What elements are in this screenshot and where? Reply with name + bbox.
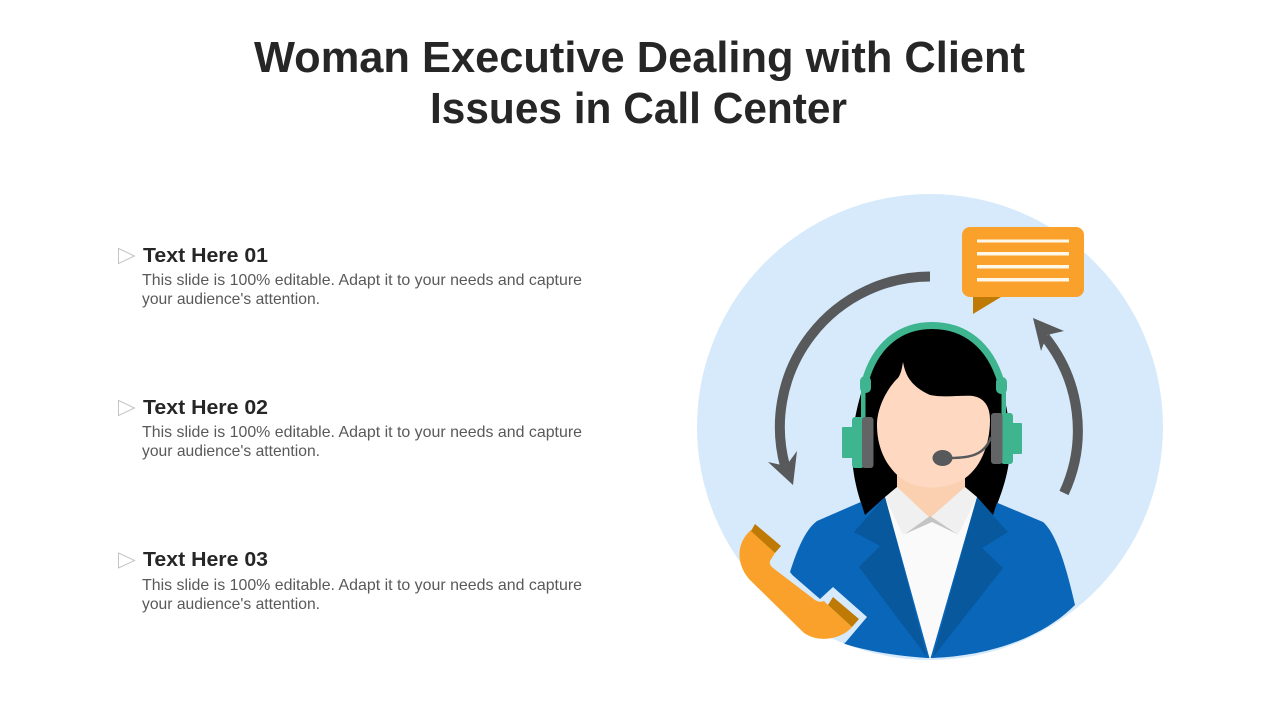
right lapel (933, 498, 1008, 657)
heading 3: Text Here 03 (143, 549, 268, 571)
illustration: call center executive (697, 194, 1163, 660)
body text 2: your audience's attention. (142, 443, 320, 460)
icon: triangle bullet 1 (118, 248, 134, 264)
icon: chat bubble (962, 227, 1084, 314)
hair tips over jacket (854, 470, 1006, 515)
jacket (790, 497, 1075, 658)
icon: phone handset (739, 524, 867, 643)
left lapel (854, 497, 927, 657)
body text 3: This slide is 100% editable. Adapt it to your needs and capture (142, 577, 582, 594)
hair (852, 328, 1010, 515)
arrow: left cycle (768, 276, 930, 485)
arrow: right cycle (1033, 318, 1078, 493)
heading 2: Text Here 02 (143, 397, 268, 419)
list item 3 (118, 549, 582, 613)
neck (897, 475, 965, 518)
body text 2: This slide is 100% editable. Adapt it to your needs and capture (142, 424, 582, 441)
body text 2 (142, 424, 582, 460)
icon: triangle bullet 2 (118, 400, 134, 416)
title (254, 33, 1025, 133)
icon: triangle bullet 3 (118, 553, 134, 568)
title: Issues in Call Center (430, 84, 847, 133)
background circle (697, 194, 1163, 660)
collar (885, 487, 977, 535)
body text 1 (142, 272, 582, 308)
list item 1 (118, 245, 582, 308)
body text 1: This slide is 100% editable. Adapt it to your needs and capture (142, 272, 582, 289)
list item 2 (118, 397, 582, 460)
body text 3: your audience's attention. (142, 596, 320, 613)
face (877, 362, 990, 488)
shirt (885, 497, 977, 660)
title: Woman Executive Dealing with Client (254, 33, 1025, 82)
heading 1: Text Here 01 (143, 245, 268, 267)
body text 3 (142, 577, 582, 613)
headset (842, 326, 1022, 468)
body text 1: your audience's attention. (142, 291, 320, 308)
